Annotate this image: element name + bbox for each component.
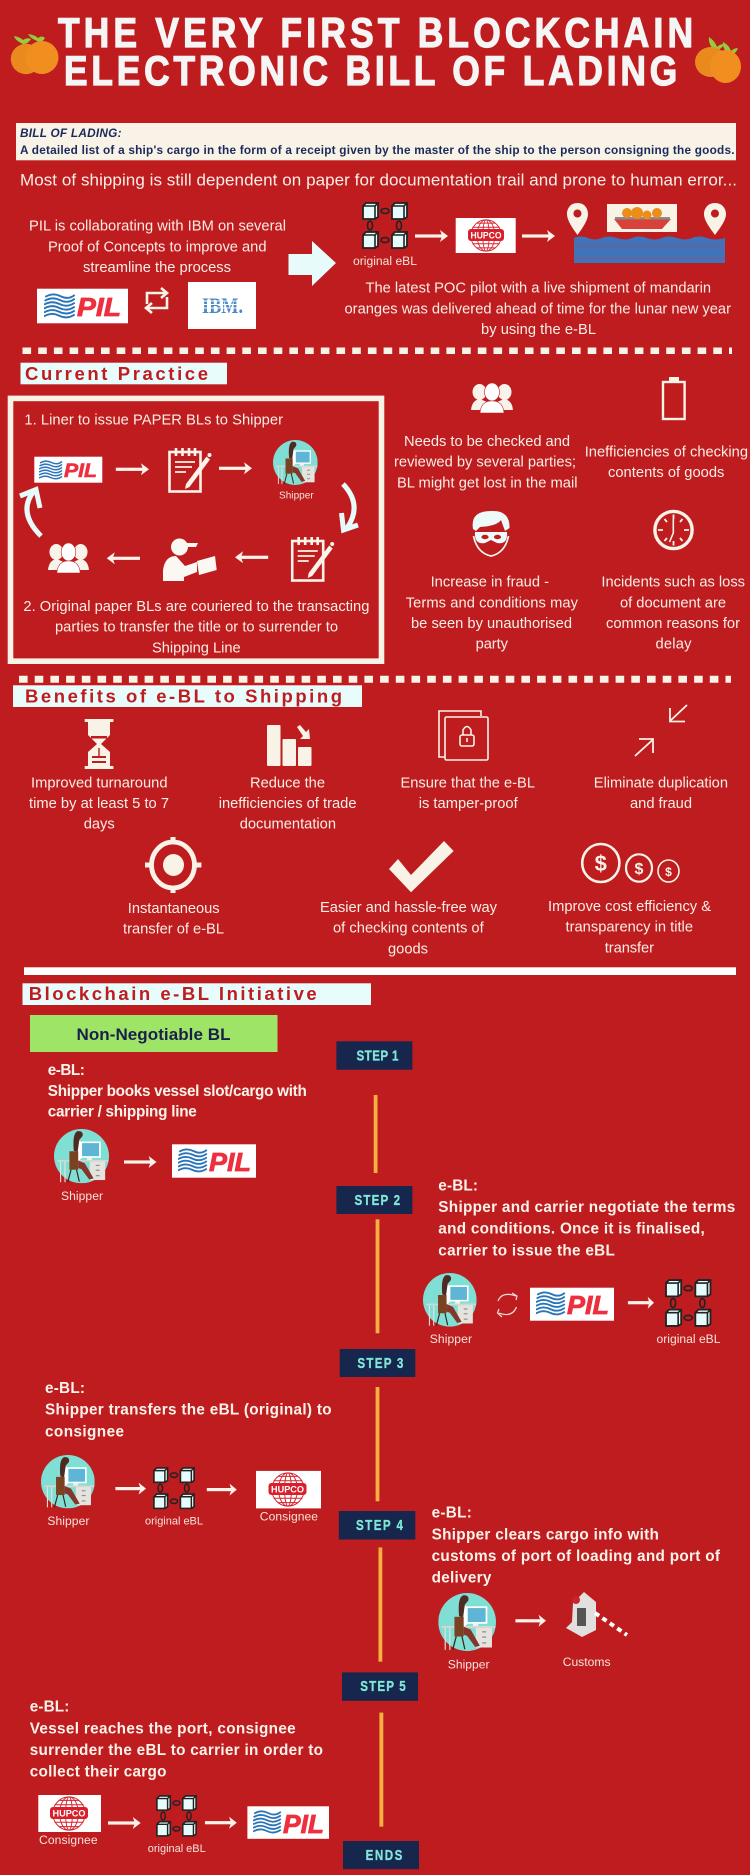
panel: current practice flow: [10, 398, 382, 661]
icon: dollar coins: $: [635, 861, 644, 878]
text: [320, 900, 498, 957]
heading: Benefits of e-BL to Shipping: Benefits of e-BL to Shipping: [25, 686, 342, 707]
description: [438, 1178, 735, 1259]
text: transfer of e-BL: [123, 922, 224, 938]
logo: HUPCO consignee: Consignee: [39, 1833, 98, 1847]
text: delay: [656, 637, 692, 653]
text: BL might get lost in the mail: [397, 475, 578, 491]
text: latest POC pilot: oranges was delivered ahead of time for the lunar new year: [344, 301, 731, 317]
logo: PIL: [172, 1144, 256, 1178]
text: inefficiencies of trade: [219, 796, 356, 812]
timeline: step 2 label: STEP 2: [354, 1192, 400, 1208]
icon: shipper: [273, 440, 318, 501]
definition text: A detailed list of a ship's cargo in the form of a receipt given by the master of the ship to the person consigning the goods.: [20, 143, 734, 157]
text: Terms and conditions may: [406, 595, 579, 611]
logo: PIL: PIL: [209, 1147, 251, 1177]
icon: blockchain original eBL: original eBL: [656, 1332, 721, 1346]
arrow: [124, 1156, 156, 1168]
timeline: end label: [343, 1841, 419, 1869]
description: collect their cargo: [30, 1764, 167, 1780]
description: [45, 1380, 332, 1440]
logo: HUPCO: [456, 218, 516, 253]
description: [30, 1699, 323, 1780]
step 2 text: parties to transfer the title or to surrender to: [55, 620, 338, 636]
step 2 text: 2. Original paper BLs are couriered to the transacting: [23, 599, 369, 615]
icon: swap arrows: [146, 288, 167, 313]
icon: blockchain original eBL: [145, 1468, 203, 1527]
text: Increase in fraud -: [431, 575, 549, 591]
timeline connector: [379, 1713, 383, 1827]
text: Improved turnaround: [31, 775, 168, 791]
arrow: curved up: [20, 490, 41, 536]
step 2 text: Shipping Line: [152, 640, 241, 656]
benefit: turnaround time: [29, 719, 169, 833]
text: common reasons for: [606, 616, 740, 632]
text: party: [476, 637, 509, 653]
logo: HUPCO: HUPCO: [470, 230, 502, 242]
icon: mandarin oranges left: [11, 34, 59, 74]
icon: hourglass: [85, 719, 113, 769]
icon: check mark: [389, 841, 454, 892]
arrow: [235, 551, 268, 563]
icon: shipper: Shipper: [47, 1514, 89, 1528]
definition heading: BILL OF LADING:: [20, 126, 122, 140]
text: contents of goods: [608, 465, 724, 481]
problem: inefficiencies: [585, 377, 748, 481]
text: PIL collaboration: PIL is collaborating with IBM on several: [29, 219, 286, 235]
text: of document are: [620, 595, 726, 611]
logo: IBM: IBM.: [202, 293, 243, 318]
description: and conditions. Once it is finalised,: [438, 1221, 705, 1238]
icon: blockchain original eBL: [656, 1280, 721, 1346]
description: carrier to issue the eBL: [438, 1242, 615, 1259]
icon: shipper: Shipper: [279, 490, 314, 501]
icon: descending bars: [267, 725, 312, 766]
icon: group of parties: [48, 543, 89, 573]
description: e-BL:: [438, 1178, 478, 1195]
step 5 content: [30, 1699, 329, 1855]
text: latest POC pilot: by using the e-BL: [481, 322, 596, 338]
text: latest POC pilot: The latest POC pilot with a live shipment of mandarin: [366, 281, 711, 297]
text: Inefficiencies of checking: [585, 444, 748, 460]
icon: shipper: [438, 1593, 496, 1672]
timeline: step 4 label: [339, 1511, 415, 1540]
icon: shipper: [41, 1455, 95, 1528]
arrow: [108, 1817, 141, 1829]
timeline connector: [376, 1219, 379, 1333]
problem: delay: [601, 511, 745, 653]
icon: converging arrows: [635, 705, 687, 756]
text: [400, 775, 535, 812]
text: latest POC pilot: [344, 281, 731, 338]
text: Reduce the: [250, 775, 325, 791]
text: days: [84, 817, 115, 833]
logo: PIL: [530, 1288, 614, 1321]
text: [548, 899, 711, 956]
icon: blockchain original eBL: [148, 1796, 206, 1855]
text: PIL collaboration: [29, 219, 286, 276]
logo: HUPCO consignee: Consignee: [260, 1510, 318, 1524]
arrow: [515, 1615, 546, 1627]
timeline: step 5 label: STEP 5: [360, 1678, 406, 1694]
icon: courier: [163, 538, 217, 581]
benefit: eliminate duplication: [594, 705, 728, 812]
badge: Non-Negotiable BL: [30, 1015, 278, 1052]
step 3 content: [41, 1380, 332, 1528]
logo: HUPCO consignee: HUPCO: [271, 1485, 304, 1496]
text: Ensure that the e-BL: [400, 775, 535, 791]
text: Instantaneous: [128, 901, 220, 917]
icon: dollar coins: $: [595, 851, 607, 876]
heading: Current Practice: Current Practice: [25, 363, 208, 384]
timeline: step 3 label: STEP 3: [357, 1355, 403, 1371]
icon: dollar coins: [582, 844, 679, 882]
description: Shipper transfers the eBL (original) to: [45, 1402, 332, 1419]
arrow: [219, 462, 252, 474]
icon: customs barrier: Customs: [563, 1655, 610, 1669]
timeline: step 5 label: [342, 1672, 418, 1701]
timeline connector: [378, 1548, 382, 1662]
text: [601, 575, 745, 653]
icon: location pin destination: [704, 203, 726, 235]
icon: clock: [655, 511, 692, 549]
text: [406, 575, 579, 653]
icon: shipper: [423, 1273, 477, 1346]
logo: PIL: [37, 289, 128, 323]
icon: paper notepad: [170, 448, 212, 492]
timeline: step 4 label: STEP 4: [356, 1517, 404, 1533]
arrow: [628, 1297, 654, 1309]
description: customs of port of loading and port of: [432, 1548, 721, 1565]
arrow: [116, 463, 149, 475]
icon: shipper: [54, 1129, 109, 1203]
icon: paper notepad: [292, 537, 334, 580]
text: goods: [388, 941, 428, 957]
arrow: [522, 230, 555, 242]
icon: blockchain original eBL: original eBL: [353, 254, 417, 268]
icon: blockchain original eBL: original eBL: [145, 1515, 203, 1527]
timeline: step 2 label: [336, 1186, 412, 1214]
text: Improve cost efficiency &: [548, 899, 711, 915]
logo: HUPCO consignee: [38, 1795, 101, 1847]
icon: location pin origin: [567, 203, 588, 235]
text: [394, 434, 578, 491]
text: Eliminate duplication: [594, 775, 728, 791]
logo: PIL: PIL: [283, 1809, 324, 1839]
step 4 content: [432, 1505, 721, 1672]
description: e-BL:: [45, 1380, 85, 1397]
description: delivery: [432, 1569, 492, 1586]
benefit: instantaneous transfer: [123, 837, 224, 938]
intro sentence: Most of shipping is still dependent on paper for documentation trail and prone to human error...: [20, 171, 737, 190]
text: [219, 775, 356, 833]
icon: dollar coins: $: [665, 865, 672, 879]
text: PIL collaboration: Proof of Concepts to improve and: [48, 239, 266, 255]
text: PIL collaboration: streamline the process: [83, 260, 231, 276]
benefit: cost efficiency: [548, 844, 711, 956]
text: be seen by unauthorised: [411, 616, 572, 632]
text: documentation: [240, 817, 336, 833]
title: ELECTRONIC BILL OF LADING: [64, 48, 677, 95]
step 2 content: [423, 1178, 735, 1346]
icon: customs barrier: [563, 1592, 627, 1669]
logo: IBM: [188, 282, 256, 329]
description: Shipper and carrier negotiate the terms: [438, 1199, 735, 1216]
arrow: [115, 1483, 146, 1495]
text: and fraud: [630, 796, 692, 812]
title: [58, 10, 693, 95]
description: carrier / shipping line: [48, 1104, 197, 1121]
text: of checking contents of: [333, 921, 485, 937]
ocean: [574, 236, 725, 263]
text: reviewed by several parties;: [394, 455, 576, 471]
text: [123, 901, 224, 938]
arrow: big right arrow: [288, 241, 336, 286]
text: time by at least 5 to 7: [29, 796, 169, 812]
badge: Non-Negotiable BL: Non-Negotiable BL: [76, 1025, 230, 1044]
description: consignee: [45, 1423, 124, 1440]
title: THE VERY FIRST BLOCKCHAIN: [58, 10, 693, 57]
timeline: end label: ENDS: [366, 1847, 403, 1863]
text: Easier and hassle-free way: [320, 900, 498, 916]
icon: shipper: Shipper: [448, 1658, 490, 1672]
description: e-BL:: [432, 1505, 472, 1522]
icon: shipper: Shipper: [430, 1332, 472, 1346]
benefit: tamper-proof: [400, 711, 535, 812]
timeline: step 1 label: STEP 1: [356, 1047, 399, 1064]
description: Shipper clears cargo info with: [432, 1526, 659, 1544]
problem: fraud: [406, 511, 579, 653]
icon: locked documents: [439, 711, 488, 760]
description: Shipper books vessel slot/cargo with: [48, 1083, 307, 1100]
text: transparency in title: [566, 920, 693, 936]
icon: negotiate cycle: [498, 1293, 517, 1317]
description: [48, 1062, 307, 1121]
text: [29, 775, 169, 833]
arrow: curved down: [342, 484, 358, 530]
description: Vessel reaches the port, consignee: [30, 1721, 296, 1738]
icon: blockchain original eBL: [353, 203, 417, 268]
text: is tamper-proof: [419, 796, 519, 812]
description: [432, 1505, 721, 1586]
description: e-BL:: [48, 1062, 85, 1079]
logo: HUPCO consignee: [256, 1471, 321, 1524]
icon: low battery: [663, 377, 685, 419]
timeline: step 3 label: [340, 1349, 415, 1377]
icon: group: [471, 383, 513, 413]
arrow: [415, 230, 448, 242]
logo: HUPCO consignee: HUPCO: [52, 1809, 86, 1820]
text: transfer: [605, 940, 654, 956]
arrow: [205, 1817, 237, 1829]
benefit: hassle-free checking: [320, 841, 498, 957]
text: [585, 444, 748, 481]
timeline: step 1 label: [336, 1041, 412, 1070]
logo: PIL: [247, 1806, 329, 1839]
heading: Blockchain e-BL Initiative: Blockchain e-BL Initiative: [29, 983, 317, 1004]
description: e-BL:: [30, 1699, 69, 1716]
panel: bill of lading definition: [16, 123, 736, 160]
step 2 text: [23, 599, 369, 656]
logo: PIL: PIL: [567, 1290, 609, 1320]
description: surrender the eBL to carrier in order to: [30, 1742, 323, 1759]
step 1 text: 1. Liner to issue PAPER BLs to Shipper: [24, 412, 283, 428]
step 1 content: [48, 1062, 307, 1203]
logo: PIL: [34, 457, 102, 483]
text: Needs to be checked and: [404, 434, 570, 450]
timeline connector: [376, 1387, 379, 1501]
benefit: reduce inefficiencies: [219, 725, 356, 833]
icon: shipper: Shipper: [61, 1189, 103, 1203]
problem: multiple parties: [394, 383, 578, 491]
logo: PIL: PIL: [77, 292, 121, 322]
logo: PIL: PIL: [64, 461, 97, 482]
icon: blockchain original eBL: original eBL: [148, 1843, 206, 1855]
text: [594, 775, 728, 812]
timeline connector: [374, 1095, 378, 1173]
icon: masked person: [473, 511, 510, 556]
arrow: [207, 1484, 237, 1496]
icon: ship on ocean: [607, 204, 677, 232]
icon: mandarin oranges right: [695, 37, 741, 83]
arrow: [107, 552, 140, 564]
icon: target: [145, 837, 201, 893]
text: Incidents such as loss: [601, 575, 745, 591]
